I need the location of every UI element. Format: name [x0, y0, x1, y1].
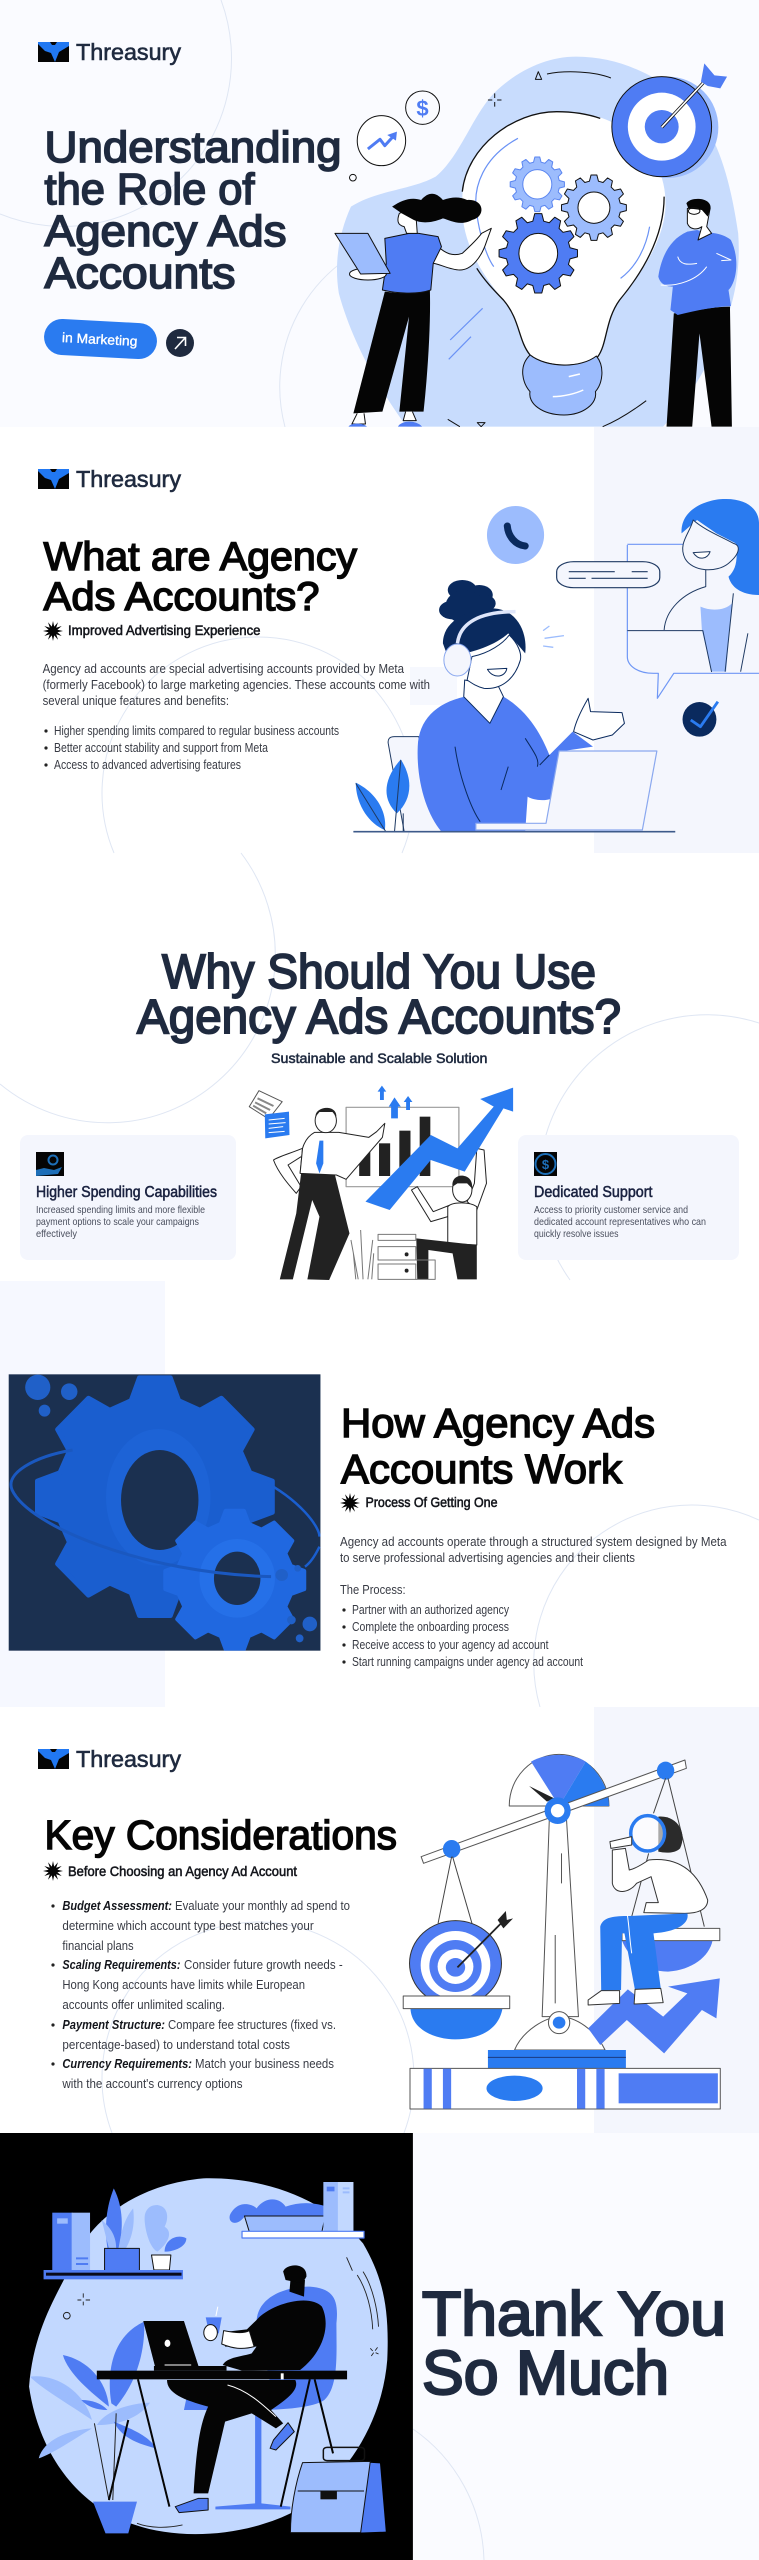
floor plant	[30, 2322, 156, 2533]
panel: what are agency ads accounts	[0, 427, 759, 860]
closing title: Thank You	[422, 2280, 726, 2349]
figure: thinking man	[658, 199, 736, 427]
panel: how agency ads accounts work	[0, 1281, 759, 1707]
image: 3D blue gears	[9, 1374, 320, 1651]
title: Accounts	[44, 249, 236, 298]
pillar and base	[515, 1817, 605, 2050]
book stack	[410, 2050, 720, 2109]
chart board	[346, 1107, 459, 1187]
bullet list: considerations: determine which account type best matches your	[62, 1918, 314, 1933]
figure: woman with tablet	[335, 194, 491, 427]
decorative sparkle and arc	[488, 72, 611, 107]
heading: Accounts Work	[341, 1446, 623, 1492]
bullet list: benefits: Access to advanced advertising features	[54, 757, 241, 772]
bullet list: considerations	[51, 1898, 350, 2091]
drawers and plant	[351, 1230, 435, 1279]
desk line	[353, 831, 675, 833]
card: higher spending capabilities: payment options to scale your campaigns	[36, 1216, 199, 1228]
figure: person with magnifier	[588, 1816, 708, 2005]
closing title: So Much	[422, 2339, 669, 2408]
text block: definition	[43, 661, 430, 708]
bullet list: process steps	[342, 1602, 583, 1669]
card: dedicated support: Dedicated Support	[534, 1184, 653, 1201]
subheading: Improved Advertising Experience	[68, 622, 261, 638]
icon: target with arrow	[612, 63, 727, 178]
heading: Agency Ads Accounts?	[137, 991, 621, 1044]
title: Understanding	[44, 123, 342, 172]
bullet list: considerations: Budget Assessment:	[62, 1898, 172, 1913]
icon: check badge	[683, 702, 718, 737]
title: Agency Ads	[44, 207, 286, 256]
decorative sparkles	[77, 2257, 379, 2527]
panel: thank you	[0, 2133, 759, 2560]
left pan with target	[403, 1857, 513, 2039]
heading	[137, 946, 621, 1044]
bulb	[448, 112, 666, 427]
bullet list: considerations: with the account's currency options	[62, 2076, 243, 2091]
heading	[44, 535, 357, 619]
card: dedicated support: quickly resolve issues	[534, 1228, 618, 1240]
heading: How Agency Ads	[341, 1400, 655, 1446]
heading: Key Considerations	[44, 1812, 397, 1858]
subheading	[43, 621, 261, 641]
card: dedicated support	[518, 1135, 739, 1260]
panel: hero	[0, 0, 759, 427]
card: higher spending capabilities: Higher Spending Capabilities	[36, 1184, 217, 1201]
small up arrows	[378, 1086, 412, 1118]
card: dedicated support: dedicated account representatives who can	[534, 1216, 706, 1228]
bullet list: considerations: Scaling Requirements:	[62, 1957, 180, 1972]
laptop	[476, 751, 657, 830]
illustration: video support call	[353, 499, 759, 832]
bullet list: considerations: Evaluate your monthly ad spend to	[175, 1898, 350, 1913]
logo: Threasury: Threasury	[76, 39, 181, 65]
bullet list: considerations: Consider future growth needs -	[184, 1957, 343, 1972]
left shelf with plants and books	[44, 2188, 186, 2279]
background blob	[29, 2178, 388, 2534]
subheading	[340, 1493, 498, 1513]
button: in Marketing	[43, 318, 158, 360]
chair	[184, 2287, 337, 2410]
illustration: growth chart with two people	[249, 1086, 513, 1280]
text block: definition: Agency ad accounts are special advertising accounts provided by Meta	[43, 661, 405, 676]
subheading: Sustainable and Scalable Solution	[271, 1050, 488, 1066]
plant	[356, 759, 409, 832]
card: higher spending capabilities: Increased spending limits and more flexible	[36, 1204, 205, 1216]
button: in Marketing: in Marketing	[62, 330, 138, 349]
remote agent in speech frame	[627, 499, 759, 698]
heading	[341, 1400, 655, 1492]
right pan	[622, 1778, 720, 1972]
text block: definition: (formerly Facebook) to large marketing agencies. These accounts come with	[43, 677, 430, 692]
text block: intro: The Process:	[340, 1582, 406, 1597]
card: higher spending capabilities	[20, 1135, 236, 1260]
icon: arrow button	[166, 329, 194, 357]
bullet list: considerations: accounts offer unlimited scaling.	[62, 1997, 225, 2012]
bullet list: considerations: percentage-based) to understand total costs	[62, 2037, 290, 2052]
heading: Ads Accounts?	[44, 575, 320, 619]
card: dedicated support: Access to priority customer service and	[534, 1204, 688, 1216]
desk	[97, 2371, 347, 2507]
text block: intro: to serve professional advertising agencies and their clients	[340, 1550, 635, 1565]
bullet list: considerations: Currency Requirements:	[62, 2056, 192, 2071]
big growth arrow	[365, 1088, 513, 1210]
subheading: Process Of Getting One	[366, 1494, 498, 1510]
title: the Role of	[44, 165, 255, 214]
panel: key considerations	[0, 1707, 759, 2133]
bullet list: process steps: Receive access to your agency ad account	[352, 1637, 549, 1652]
bullet list: considerations: Hong Kong accounts have limits while European	[62, 1977, 305, 1992]
bullet list: process steps: Start running campaigns under agency ad account	[352, 1654, 583, 1669]
growth arrow	[588, 1978, 720, 2053]
bullet list: considerations: Compare fee structures (fixed vs.	[168, 2017, 336, 2032]
panel: why use agency ads accounts	[0, 853, 759, 1281]
closing title	[422, 2280, 726, 2408]
bullet list: process steps: Complete the onboarding process	[352, 1619, 509, 1634]
bullet list: considerations: Payment Structure:	[62, 2017, 165, 2032]
icon: dollar bubble	[406, 91, 440, 124]
figure: man presenting	[273, 1108, 385, 1280]
subheading: Before Choosing an Agency Ad Account	[68, 1863, 297, 1879]
illustration: light bulb with gears and people	[335, 57, 739, 427]
notes	[249, 1091, 289, 1138]
heading: Why Should You Use	[162, 946, 596, 999]
gears	[499, 157, 626, 293]
card: higher spending capabilities: effectively	[36, 1228, 78, 1240]
bullet list: benefits	[44, 723, 339, 772]
text block: definition: several unique features and benefits:	[43, 693, 229, 708]
subheading	[43, 1861, 297, 1881]
icon: dollar coin	[534, 1152, 557, 1176]
briefcase	[290, 2447, 386, 2533]
bullet list: considerations: Match your business needs	[195, 2056, 334, 2071]
dollar sign: $	[416, 96, 429, 121]
chat bubble	[557, 562, 660, 588]
text block: intro	[340, 1534, 727, 1597]
illustration: balance scale with target and person	[403, 1754, 720, 2109]
icon: coin in hand	[36, 1152, 64, 1176]
gauge	[509, 1754, 609, 1806]
icon: phone	[487, 506, 544, 564]
illustration: person working at desk	[0, 2133, 413, 2560]
bullet list: benefits: Higher spending limits compared to regular business accounts	[54, 723, 339, 738]
bullet list: process steps: Partner with an authorized agency	[352, 1602, 509, 1617]
icon: dollar coin: $	[542, 1157, 550, 1172]
right shelf	[230, 2182, 364, 2238]
title	[44, 123, 342, 298]
icon: growth chart bubble	[349, 116, 406, 181]
figure: woman holding arrow	[411, 1148, 486, 1279]
heading: What are Agency	[44, 535, 357, 579]
logo: Threasury: Threasury	[76, 466, 181, 492]
laptop	[143, 2321, 227, 2371]
figure: agent with headset	[388, 580, 624, 832]
bullet list: considerations: financial plans	[62, 1938, 134, 1953]
bullet list: benefits: Better account stability and support from Meta	[54, 740, 269, 755]
logo: Threasury: Threasury	[76, 1746, 181, 1772]
beam	[421, 1760, 686, 1863]
figure: man with coffee	[167, 2265, 326, 2513]
